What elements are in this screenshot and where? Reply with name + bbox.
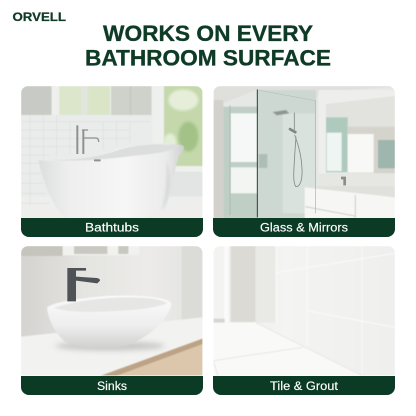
panel: glass and mirrors: Glass & Mirrors bbox=[260, 222, 348, 234]
faucet bbox=[341, 177, 346, 185]
photo: white tile bbox=[213, 246, 395, 376]
panel: sinks bbox=[21, 246, 203, 395]
label bar bbox=[213, 218, 395, 237]
panel: tile and grout: Tile & Grout bbox=[270, 381, 339, 393]
photo: glass shower and mirror bbox=[213, 86, 395, 218]
panel: sinks: Sinks bbox=[97, 381, 127, 393]
faucet bbox=[77, 125, 99, 154]
photo: vessel sink bbox=[21, 246, 203, 376]
title: BATHROOM SURFACE bbox=[85, 46, 331, 70]
panel: bathtubs: Bathtubs bbox=[85, 222, 139, 234]
title bbox=[85, 21, 331, 70]
panel: glass and mirrors bbox=[213, 86, 395, 237]
label bar bbox=[21, 376, 203, 395]
panel: bathtubs bbox=[21, 86, 203, 237]
faucet bbox=[67, 268, 100, 301]
sink bowl bbox=[47, 296, 172, 349]
label bar bbox=[21, 218, 203, 237]
label bar bbox=[213, 376, 395, 395]
logo: ORVELL: ORVELL bbox=[12, 10, 66, 24]
photo: bathtub bbox=[21, 86, 203, 218]
tub bbox=[38, 143, 184, 218]
title: WORKS ON EVERY bbox=[103, 21, 313, 46]
panel: tile and grout bbox=[213, 246, 395, 395]
